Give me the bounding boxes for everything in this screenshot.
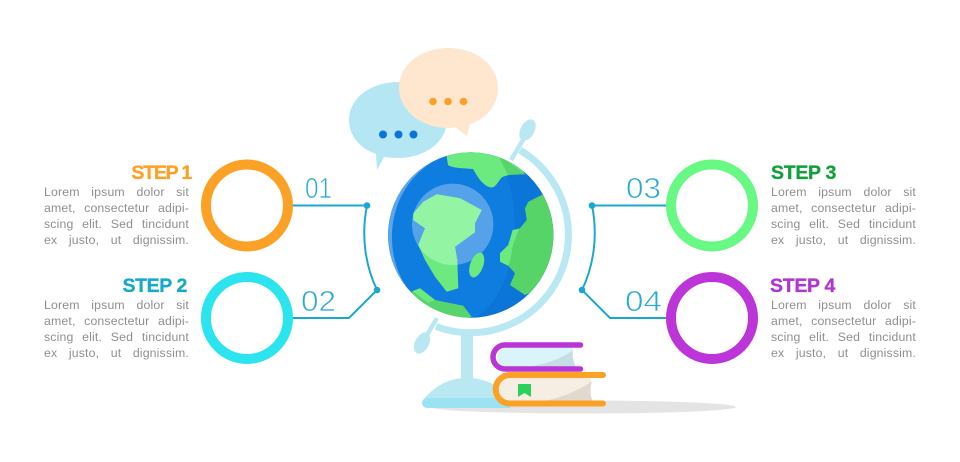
ring: step 3 [671, 164, 753, 246]
continent: top [446, 152, 525, 188]
ring: step 1 [206, 164, 288, 246]
body: step 1: Lorem ipsum dolor sit [44, 185, 189, 199]
ground shadow [430, 400, 736, 414]
body: step 2 [44, 298, 189, 360]
body: step 4: ex justo, ut dignissim. [771, 346, 916, 360]
body: step 4: scing elit. Sed tincidunt [771, 330, 916, 344]
body: step 4: Lorem ipsum dolor sit [771, 298, 916, 312]
globe [388, 152, 554, 318]
body: step 3: amet, consectetur adipi- [771, 201, 916, 215]
heading: step 3: STEP 3 [771, 162, 836, 184]
body: step 4 [771, 298, 916, 360]
number 02: 02 [301, 286, 336, 318]
speech bubble: peach [399, 48, 498, 136]
body: step 3 [771, 185, 916, 247]
body: step 1: scing elit. Sed tincidunt [44, 217, 189, 231]
ring: step 2 [206, 277, 288, 359]
connector: steps 1 and 2 [292, 202, 380, 318]
body: step 4: amet, consectetur adipi- [771, 314, 916, 328]
text block: step 2 [44, 275, 189, 360]
body: step 1: ex justo, ut dignissim. [44, 233, 189, 247]
body: step 3: scing elit. Sed tincidunt [771, 217, 916, 231]
number 04: 04 [625, 286, 662, 318]
body: step 3: Lorem ipsum dolor sit [771, 185, 916, 199]
body: step 2: ex justo, ut dignissim. [44, 346, 189, 360]
body: step 2: Lorem ipsum dolor sit [44, 298, 189, 312]
heading: step 4: STEP 4 [770, 275, 835, 297]
text block: step 1 [44, 162, 192, 247]
books [493, 345, 603, 404]
heading: step 2: STEP 2 [123, 275, 187, 297]
text block: step 4 [770, 275, 916, 360]
body: step 2: amet, consectetur adipi- [44, 314, 189, 328]
heading: step 1: STEP 1 [131, 162, 191, 184]
ring: step 4 [671, 277, 753, 359]
number 03: 03 [626, 173, 661, 205]
connector: steps 3 and 4 [579, 202, 667, 318]
continent: bottom [412, 288, 472, 318]
number 01: 01 [305, 173, 332, 205]
body: step 1 [44, 185, 189, 247]
body: step 1: amet, consectetur adipi- [44, 201, 189, 215]
speech bubble: blue [349, 82, 447, 170]
continent: middle [413, 194, 482, 292]
globe stand [410, 117, 568, 408]
text block: step 3 [771, 162, 916, 247]
body: step 2: scing elit. Sed tincidunt [44, 330, 189, 344]
continent: right [500, 195, 554, 295]
globe illustration and connectors [201, 48, 758, 414]
body: step 3: ex justo, ut dignissim. [771, 233, 916, 247]
